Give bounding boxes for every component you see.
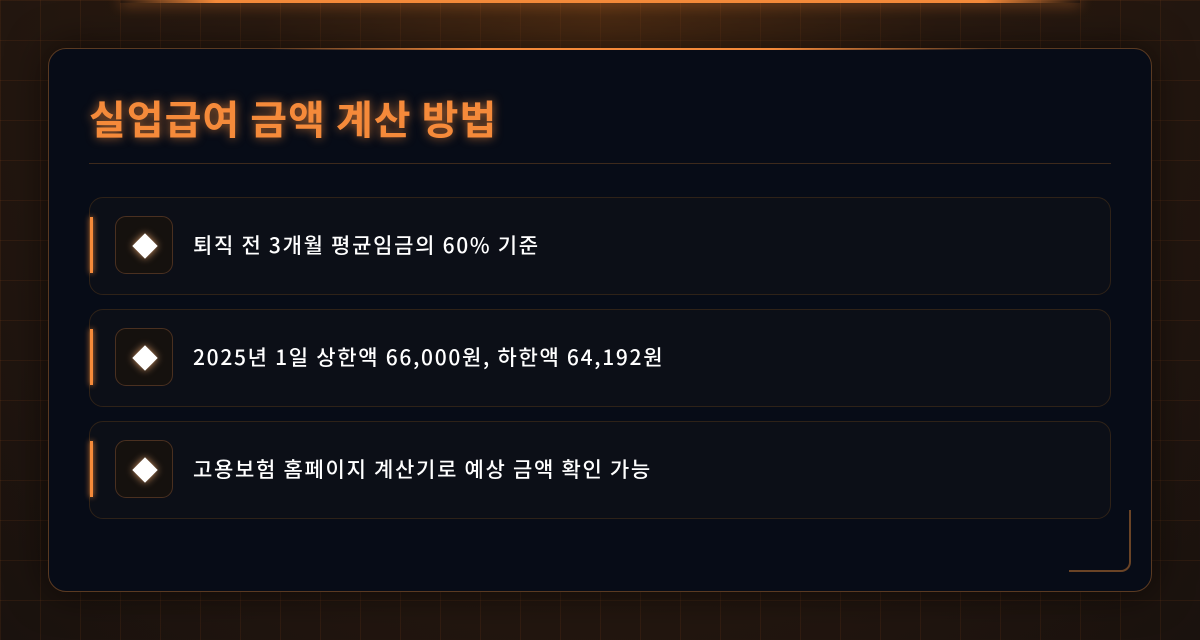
text 3: 고용보험 홈페이지 계산기로 예상 금액 확인 가능 <box>193 454 652 484</box>
panel: main card <box>48 48 1152 592</box>
text 1: 퇴직 전 3개월 평균임금의 60% 기준 <box>193 230 540 260</box>
item 1 <box>89 197 1111 295</box>
item 2 <box>89 309 1111 407</box>
icon: diamond <box>115 328 173 386</box>
item 3 <box>89 421 1111 519</box>
icon: diamond <box>115 216 173 274</box>
icon: diamond <box>115 440 173 498</box>
title: 실업급여 금액 계산 방법 <box>89 88 497 146</box>
text 2: 2025년 1일 상한액 66,000원, 하한액 64,192원 <box>193 342 664 372</box>
